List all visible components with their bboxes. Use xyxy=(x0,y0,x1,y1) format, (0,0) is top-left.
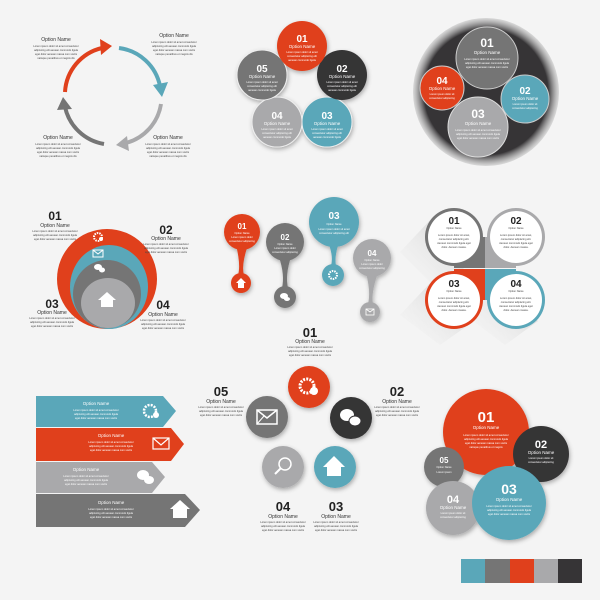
quadrant 04: Option Name xyxy=(508,289,524,293)
dark disc xyxy=(413,18,559,166)
circle 02: Option Name xyxy=(528,450,555,455)
circle 02: Option Name xyxy=(329,74,356,79)
circle 05 xyxy=(237,50,287,100)
item 01: Option Name xyxy=(295,339,325,345)
circle 03: adipiscing elit aenean commodo ligula xyxy=(487,508,531,512)
ribbon teal: Option Name xyxy=(83,401,110,406)
quadrant 04: 04 xyxy=(510,279,522,290)
quadrant 01: Option Name xyxy=(446,226,462,230)
label 01: Option Name xyxy=(40,223,70,229)
panel: icon flower xyxy=(198,325,420,532)
label 02: Option Name xyxy=(151,236,181,242)
ribbon light gray: eget dolor aenean massa cum sociis xyxy=(65,482,108,486)
drop 03: consectetur adipiscing elit xyxy=(319,231,349,235)
text: option bottom-left: Lorem ipsum dolor sit amet consectetur xyxy=(35,142,81,146)
label 02: Lorem ipsum dolor sit amet consectetur xyxy=(143,242,189,246)
quadrant 03 xyxy=(425,269,485,329)
item 02: Option Name xyxy=(382,399,412,405)
label 03: eget dolor aenean massa cum sociis xyxy=(31,324,74,328)
quadrant 03: dolor. Aenean massa. xyxy=(442,308,467,312)
panel: five circles xyxy=(237,21,367,147)
ring light gray xyxy=(81,278,135,328)
item 05: 05 xyxy=(214,384,228,399)
circle 03 xyxy=(448,97,508,157)
quadrant 04: dolor. Aenean massa. xyxy=(504,308,529,312)
long shadows xyxy=(400,217,538,345)
item 05: Lorem ipsum dolor sit amet consectetur xyxy=(198,405,244,409)
label 04 xyxy=(140,298,186,330)
text: option top-right: Lorem ipsum dolor sit amet consectetur xyxy=(151,40,197,44)
circle 02: 02 xyxy=(336,64,348,75)
item 05: adipiscing elit aenean commodo ligula xyxy=(199,409,243,413)
drop 02 xyxy=(266,223,304,308)
panel: drops xyxy=(224,197,391,322)
drop 01: Option Name xyxy=(234,231,250,235)
quadrant 02: 02 xyxy=(510,216,522,227)
circle 03: eget dolor aenean massa cum sociis xyxy=(488,512,531,516)
drop 03: Lorem ipsum dolor sit amet xyxy=(318,227,350,231)
circle 03: Option Name xyxy=(465,121,492,126)
item 01 xyxy=(287,325,333,408)
circle 02: aenean commodo ligula xyxy=(328,88,356,92)
circle 03: Option Name xyxy=(314,121,341,126)
item 02: Lorem ipsum dolor sit amet consectetur xyxy=(374,405,420,409)
quadrant 03: Aenean commodo ligula eget xyxy=(437,304,471,308)
quadrant 02: Lorem ipsum dolor sit amet, xyxy=(500,233,532,237)
circle 01: aenean commodo ligula xyxy=(288,58,316,62)
item 04: 04 xyxy=(276,499,291,514)
item 02: 02 xyxy=(390,384,404,399)
circle 01: adipiscing elit aenean commodo ligula xyxy=(464,437,508,441)
label 01: 01 xyxy=(48,209,62,223)
drop 03 xyxy=(309,197,359,286)
circle 05: 05 xyxy=(440,456,449,465)
circle 01: Option Name xyxy=(474,50,501,55)
label 01: eget dolor aenean massa cum sociis xyxy=(34,237,77,241)
text: option bottom-left: adipiscing elit aenean commodo ligula xyxy=(36,146,80,150)
circle 02: consectetur adipiscing xyxy=(512,106,538,110)
circle 01: Lorem ipsum dolor sit amet consectetur xyxy=(463,433,509,437)
label 04: 04 xyxy=(156,298,170,312)
circle 01 xyxy=(443,389,529,475)
item 01: 01 xyxy=(303,325,317,340)
label 03: adipiscing elit aenean commodo ligula xyxy=(30,320,74,324)
text: option top-left: Lorem ipsum dolor sit amet consectetur xyxy=(33,44,79,48)
panel: four quadrant circles xyxy=(400,208,545,345)
circle 04 xyxy=(426,481,480,535)
quadrant 04: consectetur adipiscing elit. xyxy=(501,300,531,304)
circle 01 xyxy=(277,21,327,71)
circle 01: 01 xyxy=(296,34,308,45)
circle 02: Lorem ipsum dolor sit xyxy=(513,102,538,106)
circle 05: 05 xyxy=(256,64,268,75)
quadrant 03: 03 xyxy=(448,279,460,290)
panel: arrow cycle xyxy=(33,33,197,158)
circle 04: 04 xyxy=(447,494,460,506)
item 03: 03 xyxy=(329,499,343,514)
item 03: Lorem ipsum dolor sit amet consectetur xyxy=(313,520,359,524)
drop 03: Option Name xyxy=(326,222,342,226)
ring orange xyxy=(57,229,157,329)
circle 01: eget dolor aenean massa cum sociis xyxy=(465,441,508,445)
label 02: adipiscing elit aenean commodo ligula xyxy=(144,246,188,250)
circle 05: aenean commodo ligula xyxy=(248,88,276,92)
circle 02: consectetur adipiscing elit xyxy=(327,84,357,88)
text: option bottom-right: adipiscing elit aenean commodo ligula xyxy=(146,146,190,150)
item 03: eget dolor aenean massa cum sociis xyxy=(315,528,358,532)
label 03: 03 xyxy=(45,297,59,311)
circle 03: adipiscing elit aenean commodo ligula xyxy=(456,132,500,136)
drop 02: Option Name xyxy=(277,242,293,246)
arrow: orange xyxy=(65,39,112,92)
quadrant 01: dolor. Aenean massa. xyxy=(442,245,467,249)
quadrant 03: consectetur adipiscing elit. xyxy=(439,300,469,304)
item 02: eget dolor aenean massa cum sociis xyxy=(376,413,419,417)
circle 04: aenean commodo ligula xyxy=(263,135,291,139)
panel: nested arcs xyxy=(29,209,189,330)
circle 03 xyxy=(302,97,352,147)
text: option top-right: adipiscing elit aenean commodo ligula xyxy=(152,44,196,48)
label 01: adipiscing elit aenean commodo ligula xyxy=(33,233,77,237)
item 04: adipiscing elit aenean commodo ligula xyxy=(261,524,305,528)
quadrant 04: Aenean commodo ligula eget xyxy=(499,304,533,308)
label 02: 02 xyxy=(159,223,173,237)
circle 04: Lorem ipsum dolor sit xyxy=(441,511,466,515)
circle 01: adipiscing elit aenean commodo ligula xyxy=(465,61,509,65)
circle 02: consectetur adipiscing xyxy=(528,460,554,464)
label 04: Option Name xyxy=(148,312,178,318)
circle 05: Lorem ipsum dolor sit amet xyxy=(246,80,278,84)
text: option bottom-right: natoque penatibus et magnis dis xyxy=(149,154,187,158)
circle 04: Option Name xyxy=(264,121,291,126)
circle 01: 01 xyxy=(480,36,494,50)
label 03 xyxy=(29,297,75,328)
ribbon orange xyxy=(36,428,184,461)
ribbon dark gray xyxy=(36,494,200,527)
circle 04: 04 xyxy=(436,76,448,87)
text: option bottom-right: eget dolor aenean massa cum sociis xyxy=(147,150,190,154)
arrow: dark gray xyxy=(57,97,104,144)
item 03 xyxy=(313,446,359,532)
text: option bottom-left: natoque penatibus et magnis dis xyxy=(39,154,77,158)
item 01: eget dolor aenean massa cum sociis xyxy=(289,353,332,357)
circle 02 xyxy=(513,426,569,482)
circle 01: Lorem ipsum dolor sit amet xyxy=(286,50,318,54)
panel: ribbons xyxy=(36,396,200,527)
ribbon dark gray: eget dolor aenean massa cum sociis xyxy=(90,515,133,519)
circle 01 xyxy=(456,27,518,89)
label 03: Lorem ipsum dolor sit amet consectetur xyxy=(29,316,75,320)
ribbon light gray: Option Name xyxy=(73,467,100,472)
text: option top-right: natoque penatibus et magnis dis xyxy=(155,52,193,56)
drop 04: consectetur adipiscing xyxy=(359,266,385,270)
text: option top-left: natoque penatibus et magnis dis xyxy=(37,56,75,60)
ribbon light gray: Lorem ipsum dolor sit amet consectetur xyxy=(63,474,109,478)
circle 01: consectetur adipiscing elit xyxy=(287,54,317,58)
quadrant 02 xyxy=(485,208,545,268)
quadrant 02: Option Name xyxy=(508,226,524,230)
quadrant 01 xyxy=(425,208,485,268)
circle 01: natoque penatibus et magnis xyxy=(469,445,503,449)
color swatches xyxy=(461,559,582,583)
drop 04: 04 xyxy=(368,249,377,258)
label 02: eget dolor aenean massa cum sociis xyxy=(145,250,188,254)
item 04: Option Name xyxy=(268,514,298,520)
ribbon teal: eget dolor aenean massa cum sociis xyxy=(75,416,118,420)
quadrant 01: Lorem ipsum dolor sit amet, xyxy=(438,233,470,237)
quadrant 01: consectetur adipiscing elit. xyxy=(439,237,469,241)
icon: chat xyxy=(94,264,105,272)
circle 03: 03 xyxy=(471,107,485,121)
drop 01: 01 xyxy=(238,222,247,231)
ribbon dark gray: adipiscing elit aenean commodo ligula xyxy=(89,511,133,515)
circle 03: eget dolor aenean massa cum sociis xyxy=(457,136,500,140)
circle 01: Option Name xyxy=(289,44,316,49)
quadrant 04 xyxy=(485,269,545,329)
circle 04: consectetur adipiscing xyxy=(440,515,466,519)
label 02 xyxy=(143,223,189,254)
circle 02 xyxy=(501,75,549,123)
ribbon orange: Lorem ipsum dolor sit amet consectetur xyxy=(88,440,134,444)
drop 01: consectetur adipiscing xyxy=(229,239,255,243)
circle 04: consectetur adipiscing xyxy=(429,96,455,100)
arrow: teal xyxy=(119,48,168,97)
panel: circles in dark disc xyxy=(413,18,559,166)
icon: house xyxy=(98,292,116,307)
ribbon dark gray: Lorem ipsum dolor sit amet consectetur xyxy=(88,507,134,511)
ribbon dark gray: Option Name xyxy=(98,500,125,505)
arrow: light gray xyxy=(116,104,161,151)
ribbon orange: Option Name xyxy=(98,433,125,438)
item 03: adipiscing elit aenean commodo ligula xyxy=(314,524,358,528)
circle 03: 03 xyxy=(321,111,333,122)
text: option bottom-left: Option Name xyxy=(43,135,73,141)
circle 03 xyxy=(472,466,546,540)
ribbon light gray: adipiscing elit aenean commodo ligula xyxy=(64,478,108,482)
label 04: Lorem ipsum dolor sit amet consectetur xyxy=(140,318,186,322)
circle 01: Option Name xyxy=(473,425,500,430)
circle 04: consectetur adipiscing elit xyxy=(262,131,292,135)
drop 02: consectetur adipiscing xyxy=(272,250,298,254)
item 04: Lorem ipsum dolor sit amet consectetur xyxy=(260,520,306,524)
circle 02: Lorem ipsum dolor sit xyxy=(529,456,554,460)
circle 03: aenean commodo ligula xyxy=(313,135,341,139)
item 03: Option Name xyxy=(321,514,351,520)
quadrant 02: consectetur adipiscing elit. xyxy=(501,237,531,241)
circle 05: Option Name xyxy=(436,465,452,469)
drop 01 xyxy=(224,214,260,293)
text: option top-right: eget dolor aenean massa cum sociis xyxy=(153,48,196,52)
label 01: Lorem ipsum dolor sit amet consectetur xyxy=(32,229,78,233)
text: option top-left: adipiscing elit aenean commodo ligula xyxy=(34,48,78,52)
ribbon teal: Lorem ipsum dolor sit amet consectetur xyxy=(73,408,119,412)
ribbon teal: adipiscing elit aenean commodo ligula xyxy=(74,412,118,416)
circle 03: Lorem ipsum dolor sit amet xyxy=(311,127,343,131)
item 02: adipiscing elit aenean commodo ligula xyxy=(375,409,419,413)
item 02 xyxy=(330,384,420,439)
circle 04: Option Name xyxy=(440,505,467,510)
circle 04: 04 xyxy=(271,111,283,122)
ring teal xyxy=(70,245,148,329)
text: option bottom-left xyxy=(35,135,81,158)
circle 01: eget dolor aenean massa cum sociis xyxy=(466,65,509,69)
circle 05: Lorem ipsum xyxy=(436,470,452,474)
text: option bottom-right: Lorem ipsum dolor sit amet consectetur xyxy=(145,142,191,146)
item 01: Lorem ipsum dolor sit amet consectetur xyxy=(287,345,333,349)
circle 04: Option Name xyxy=(429,86,456,91)
circle 04 xyxy=(420,66,464,110)
quadrant 03: Option Name xyxy=(446,289,462,293)
panel: overlapping circles xyxy=(424,389,569,540)
quadrant 04: Lorem ipsum dolor sit amet, xyxy=(500,296,532,300)
quadrant 03: Lorem ipsum dolor sit amet, xyxy=(438,296,470,300)
item 05: Option Name xyxy=(206,399,236,405)
text: option bottom-right xyxy=(145,135,191,158)
circle 05: Option Name xyxy=(249,74,276,79)
circle 04: Lorem ipsum dolor sit amet xyxy=(261,127,293,131)
quadrant 01: 01 xyxy=(448,216,460,227)
circle 03: Option Name xyxy=(496,497,523,502)
circle 01: 01 xyxy=(478,409,494,426)
drop 04: Option Name xyxy=(364,258,380,262)
circle 01: Lorem ipsum dolor sit amet consectetur xyxy=(464,57,510,61)
quadrant 01: Aenean commodo ligula eget xyxy=(437,241,471,245)
ribbon teal xyxy=(36,396,176,427)
circle 02: 02 xyxy=(519,86,531,97)
text: option top-right xyxy=(151,33,197,56)
circle 03: Lorem ipsum dolor sit amet consectetur xyxy=(486,504,532,508)
item 04 xyxy=(260,446,306,532)
text: option top-right: Option Name xyxy=(159,33,189,39)
text: option bottom-right: Option Name xyxy=(153,135,183,141)
text: option top-left: Option Name xyxy=(41,37,71,43)
text: option top-left xyxy=(33,37,79,60)
quadrant 02: Aenean commodo ligula eget xyxy=(499,241,533,245)
circle 05 xyxy=(424,447,464,487)
quadrant 02: dolor. Aenean massa. xyxy=(504,245,529,249)
icon: mail xyxy=(93,250,103,257)
circle 02: Option Name xyxy=(512,96,539,101)
circle 02: Lorem ipsum dolor sit amet xyxy=(326,80,358,84)
drop 02: 02 xyxy=(281,233,290,242)
icon: gear xyxy=(94,233,103,241)
text: option bottom-left: eget dolor aenean massa cum sociis xyxy=(37,150,80,154)
item 04: eget dolor aenean massa cum sociis xyxy=(262,528,305,532)
ribbon orange: adipiscing elit aenean commodo ligula xyxy=(89,444,133,448)
drop 01: Lorem ipsum dolor xyxy=(231,235,253,239)
label 04: eget dolor aenean massa cum sociis xyxy=(142,326,185,330)
item 05: eget dolor aenean massa cum sociis xyxy=(200,413,243,417)
circle 03: Lorem ipsum dolor sit amet consectetur xyxy=(455,128,501,132)
ribbon orange: eget dolor aenean massa cum sociis xyxy=(90,448,133,452)
circle 05: consectetur adipiscing elit xyxy=(247,84,277,88)
label 04: adipiscing elit aenean commodo ligula xyxy=(141,322,185,326)
ribbon light gray xyxy=(36,462,165,493)
circle 03: 03 xyxy=(501,481,517,497)
label 03: Option Name xyxy=(37,310,67,316)
item 01: adipiscing elit aenean commodo ligula xyxy=(288,349,332,353)
drop 04: Lorem ipsum dolor xyxy=(361,262,383,266)
text: option top-left: eget dolor aenean massa cum sociis xyxy=(35,52,78,56)
drop 02: Lorem ipsum dolor xyxy=(274,246,296,250)
circle 04: Lorem ipsum dolor sit xyxy=(430,92,455,96)
drop 03: 03 xyxy=(328,211,340,222)
label 01 xyxy=(32,209,78,241)
drop 04 xyxy=(353,239,391,322)
circle 04 xyxy=(252,97,302,147)
ring dark gray xyxy=(73,260,141,328)
circle 03: consectetur adipiscing elit xyxy=(312,131,342,135)
item 05 xyxy=(198,384,288,438)
circle 02 xyxy=(317,50,367,100)
circle 02: 02 xyxy=(535,439,547,451)
